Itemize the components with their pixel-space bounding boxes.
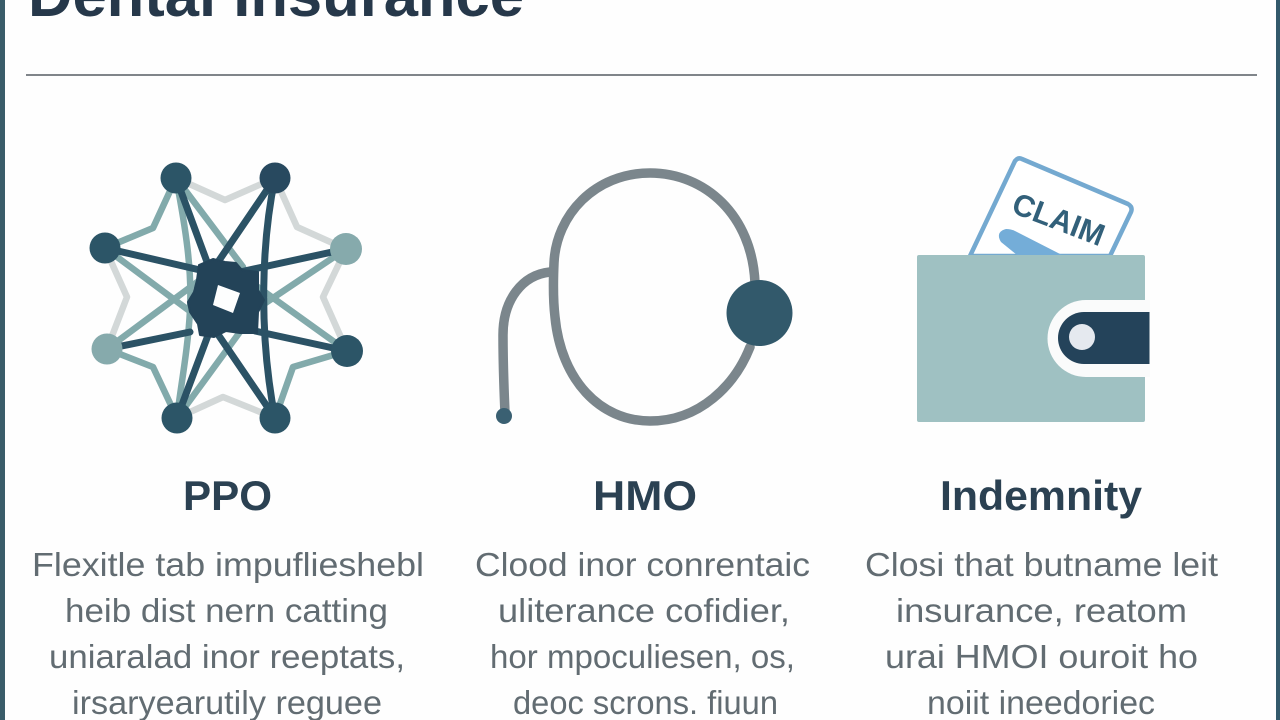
heading: HMO: HMO bbox=[593, 472, 697, 519]
icon: central hub bbox=[188, 259, 264, 337]
icon: loop end dot bbox=[496, 408, 512, 424]
text: PPO description bbox=[32, 546, 424, 720]
icon: claim form: CLAIM bbox=[1007, 186, 1110, 253]
text: PPO description: Flexitle tab impuflieshebl bbox=[32, 546, 424, 583]
text: Indemnity description: noiit ineedoriec bbox=[927, 684, 1155, 720]
text: Indemnity description: insurance, reatom bbox=[896, 592, 1187, 629]
heading: Indemnity: Indemnity bbox=[940, 472, 1143, 519]
text: PPO description: irsaryearutily reguee bbox=[72, 684, 382, 720]
text: HMO description: Clood inor conrentaic bbox=[475, 546, 810, 583]
text: PPO description: heib dist nern catting bbox=[65, 592, 388, 629]
text: Indemnity description: urai HMOI ouroit ho bbox=[885, 638, 1198, 675]
icon: claim form bbox=[970, 158, 1132, 256]
text: HMO description: hor mpoculiesen, os, bbox=[490, 638, 795, 675]
text: Indemnity description: Closi that butname leit bbox=[865, 546, 1218, 583]
heading: PPO: PPO bbox=[183, 472, 272, 519]
text: PPO description: uniaralad inor reeptats, bbox=[49, 638, 405, 675]
text: HMO description: uliterance cofidier, bbox=[498, 592, 790, 629]
icon: network nodes bbox=[90, 162, 363, 434]
icon: wallet bbox=[917, 255, 1150, 422]
panel: Indemnity bbox=[865, 158, 1218, 720]
icon: HMO closed loop bbox=[503, 173, 755, 421]
panel: PPO bbox=[32, 162, 424, 720]
text: Indemnity description bbox=[865, 546, 1218, 720]
icon: PPO provider network bbox=[105, 178, 347, 418]
text: HMO description: deoc scrons. fiuun bbox=[513, 684, 778, 720]
text: HMO description bbox=[475, 546, 810, 720]
panel: HMO bbox=[475, 173, 810, 720]
icon: loop node bbox=[726, 280, 792, 346]
